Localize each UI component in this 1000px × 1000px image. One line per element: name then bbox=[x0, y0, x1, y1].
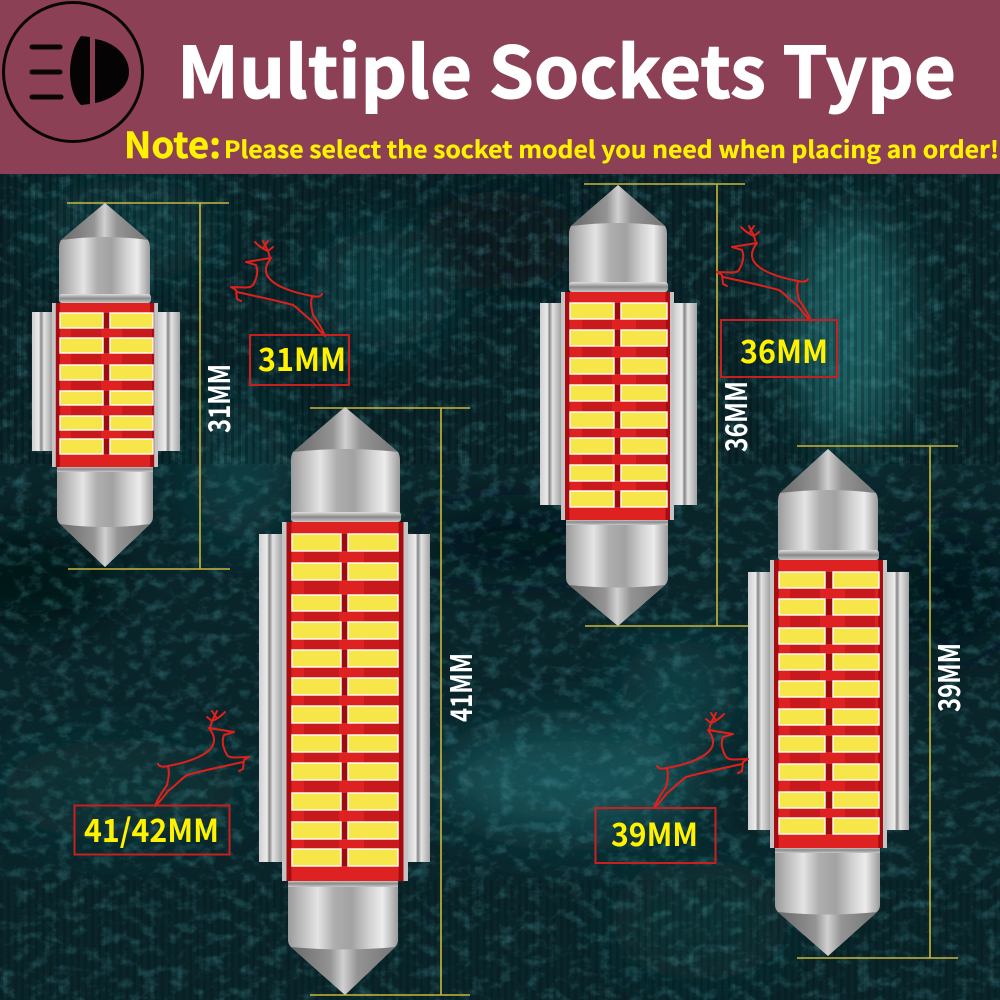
icon: headlight bbox=[4, 2, 142, 142]
dimension: 39mm: 39MM bbox=[925, 643, 969, 712]
dimension: 41mm: 41MM bbox=[437, 653, 481, 722]
header banner bbox=[0, 0, 1000, 174]
bulb: 39mm bbox=[748, 449, 909, 956]
label: 39MM bbox=[596, 808, 716, 863]
icon: deer 39mm bbox=[654, 713, 748, 808]
title: Multiple Sockets Type bbox=[177, 17, 956, 119]
icon: deer 31mm bbox=[231, 241, 325, 336]
bulb: 31mm bbox=[32, 203, 180, 567]
note label: Note: bbox=[124, 117, 221, 169]
label: 36MM bbox=[721, 320, 837, 377]
dimension: 41mm bbox=[310, 408, 481, 995]
label: 36MM: 36MM bbox=[740, 327, 828, 373]
dimension: 31mm: 31MM bbox=[195, 364, 239, 433]
label: 31MM: 31MM bbox=[258, 335, 346, 381]
dimension: 36mm: 36MM bbox=[712, 381, 756, 452]
note text: Please select the socket model you need when placing an order! bbox=[224, 131, 999, 165]
bulb: 36mm bbox=[540, 185, 697, 626]
dimension: 31mm bbox=[67, 203, 239, 569]
label: 41/42MM: 41/42MM bbox=[84, 806, 219, 852]
icon: deer 36mm bbox=[717, 226, 811, 321]
icon: deer 41/42mm bbox=[155, 711, 249, 806]
bulb: 41mm bbox=[259, 407, 430, 995]
dimension: 36mm bbox=[584, 184, 756, 626]
dimension: 39mm bbox=[797, 446, 969, 958]
label: 39MM: 39MM bbox=[611, 810, 698, 856]
